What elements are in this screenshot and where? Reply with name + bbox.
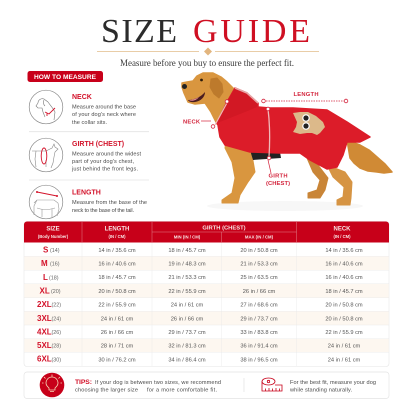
length heading: LENGTH bbox=[72, 190, 101, 197]
fit advice text: For the best fit, measure your dog bbox=[290, 380, 376, 386]
dog tail bbox=[347, 140, 392, 173]
row S: 18 in / 45.7 cm bbox=[168, 248, 206, 254]
row 5XL: (28) bbox=[52, 344, 61, 350]
girth heading: GIRTH (CHEST) bbox=[72, 141, 124, 148]
row 3XL: 3XL bbox=[37, 314, 52, 323]
row S: S bbox=[43, 246, 49, 254]
row L: (18) bbox=[49, 275, 59, 281]
table header: NECK bbox=[333, 226, 351, 232]
how to measure badge: HOW TO MEASURE bbox=[34, 74, 97, 81]
table header: (Body Number) bbox=[38, 234, 69, 239]
neck description bbox=[72, 105, 136, 126]
row 6XL: 6XL bbox=[37, 355, 52, 364]
neck description: the collar sits. bbox=[72, 120, 107, 126]
black chest strap bbox=[250, 150, 281, 160]
row M: (16) bbox=[50, 262, 60, 268]
row M: 19 in / 48.3 cm bbox=[168, 262, 206, 268]
length description: Measure from the base of the bbox=[72, 200, 147, 206]
row S bbox=[43, 246, 363, 254]
row 2XL: 2XL bbox=[37, 300, 52, 309]
row M: 21 in / 53.3 cm bbox=[240, 262, 278, 268]
row L: 21 in / 53.3 cm bbox=[168, 275, 206, 281]
icon: light bulb bbox=[40, 373, 64, 397]
row 3XL: (24) bbox=[52, 316, 61, 322]
row XL: XL bbox=[40, 286, 50, 296]
row XL bbox=[40, 286, 363, 296]
row L: 16 in / 40.6 cm bbox=[325, 275, 363, 281]
row 6XL: (30) bbox=[52, 357, 61, 363]
row 6XL: 38 in / 96.5 cm bbox=[240, 357, 278, 363]
girth measure line bbox=[266, 107, 290, 187]
table header: MAX (IN / CM) bbox=[245, 234, 274, 240]
row 2XL: 24 in / 61 cm bbox=[171, 303, 204, 309]
row 4XL: (26) bbox=[52, 330, 61, 336]
icon: measuring tape bbox=[262, 378, 282, 391]
coat owl patch bbox=[293, 112, 325, 135]
dog head and neck bbox=[182, 73, 235, 124]
fit advice text: while standing naturally. bbox=[289, 388, 352, 394]
row 2XL: 27 in / 68.6 cm bbox=[240, 303, 278, 309]
row 2XL: 20 in / 50.8 cm bbox=[325, 303, 363, 309]
row 3XL: 20 in / 50.8 cm bbox=[325, 316, 363, 322]
row S: 14 in / 35.6 cm bbox=[98, 248, 136, 254]
fit advice text bbox=[289, 380, 376, 394]
row M: M bbox=[41, 259, 48, 268]
neck heading: NECK bbox=[72, 94, 92, 101]
table header: (IN / CM) bbox=[109, 234, 126, 239]
size table bbox=[24, 222, 389, 366]
title: GUIDE bbox=[193, 13, 310, 50]
title: SIZE bbox=[101, 13, 177, 50]
row 5XL bbox=[37, 341, 361, 350]
row S: 20 in / 50.8 cm bbox=[240, 248, 278, 254]
table header: GIRTH (CHEST) bbox=[202, 226, 246, 232]
row 4XL: 29 in / 73.7 cm bbox=[168, 330, 206, 336]
girth description: part of your dog's chest, bbox=[72, 159, 134, 165]
table row stripes bbox=[24, 256, 389, 352]
row 6XL: 30 in / 76.2 cm bbox=[98, 357, 136, 363]
table header bbox=[24, 222, 389, 242]
girth measure line: GIRTH bbox=[268, 174, 288, 180]
dog illustration in red coat bbox=[182, 73, 392, 211]
row XL: 26 in / 66 cm bbox=[243, 289, 276, 295]
row XL: 20 in / 50.8 cm bbox=[98, 289, 136, 295]
girth description: just behind the front legs. bbox=[71, 167, 138, 173]
row S: (14) bbox=[50, 248, 60, 254]
how to measure badge bbox=[28, 71, 103, 82]
row 2XL: (22) bbox=[52, 303, 61, 309]
row 6XL: 24 in / 61 cm bbox=[328, 357, 361, 363]
neck description: Measure around the base bbox=[72, 105, 136, 111]
row 6XL: 34 in / 86.4 cm bbox=[168, 357, 206, 363]
row XL: (20) bbox=[51, 289, 61, 295]
coat hood bbox=[217, 88, 258, 123]
table header: (IN / CM) bbox=[334, 234, 351, 239]
girth description: Measure around the widest bbox=[72, 151, 141, 157]
panel: how to measure bbox=[28, 71, 149, 219]
length description: neck to the base of the tail. bbox=[72, 208, 134, 214]
table header: SIZE bbox=[46, 226, 60, 232]
row L: L bbox=[43, 273, 48, 282]
row XL: 22 in / 55.9 cm bbox=[168, 289, 206, 295]
dog front legs bbox=[222, 140, 255, 203]
row 5XL: 5XL bbox=[37, 341, 52, 350]
row 4XL: 4XL bbox=[37, 327, 52, 336]
tips text: If your dog is between two sizes, we recommend bbox=[95, 380, 221, 386]
row 3XL bbox=[37, 314, 363, 323]
row 3XL: 24 in / 61 cm bbox=[101, 316, 134, 322]
row M: 16 in / 40.6 cm bbox=[325, 262, 363, 268]
tips text: TIPS: bbox=[75, 379, 92, 386]
row 4XL: 26 in / 66 cm bbox=[101, 330, 134, 336]
dog back legs bbox=[307, 158, 352, 205]
tips panel bbox=[24, 372, 389, 398]
neck measure line bbox=[183, 100, 229, 128]
row L: 18 in / 45.7 cm bbox=[98, 275, 136, 281]
neck measure line: NECK bbox=[183, 120, 201, 126]
length measure line: LENGTH bbox=[294, 92, 318, 98]
table header: MIN (IN / CM) bbox=[174, 234, 201, 240]
row 2XL: 22 in / 55.9 cm bbox=[98, 303, 136, 309]
title bbox=[101, 13, 310, 50]
row 2XL bbox=[37, 300, 363, 309]
length description bbox=[72, 200, 147, 214]
row 4XL: 22 in / 55.9 cm bbox=[325, 330, 363, 336]
tips text: choosing the larger size bbox=[75, 388, 138, 394]
girth measure line: (CHEST) bbox=[266, 181, 290, 187]
row 5XL: 24 in / 61 cm bbox=[328, 344, 361, 350]
table header: LENGTH bbox=[105, 226, 129, 232]
row S: 14 in / 35.6 cm bbox=[325, 248, 363, 254]
icon: neck measurement bbox=[29, 90, 63, 124]
tips text bbox=[75, 379, 221, 394]
row 3XL: 26 in / 66 cm bbox=[171, 316, 204, 322]
row 4XL bbox=[37, 327, 363, 336]
row L bbox=[43, 273, 363, 282]
row 3XL: 29 in / 73.7 cm bbox=[240, 316, 278, 322]
row 6XL bbox=[37, 355, 361, 364]
row XL: 18 in / 45.7 cm bbox=[325, 289, 363, 295]
icon: length measurement bbox=[29, 185, 63, 219]
row 5XL: 36 in / 91.4 cm bbox=[240, 344, 278, 350]
dog ear bbox=[210, 78, 223, 98]
row M: 16 in / 40.6 cm bbox=[98, 262, 136, 268]
length measure line bbox=[262, 92, 348, 103]
row 4XL: 33 in / 83.8 cm bbox=[240, 330, 278, 336]
row M bbox=[41, 259, 363, 268]
subtitle: Measure before you buy to ensure the perfect fit. bbox=[120, 58, 294, 68]
red coat bbox=[217, 88, 370, 169]
dog muzzle and mouth bbox=[182, 79, 205, 102]
row 5XL: 32 in / 81.3 cm bbox=[168, 344, 206, 350]
neck description: of your dog's neck where bbox=[72, 112, 136, 118]
row L: 25 in / 63.5 cm bbox=[240, 275, 278, 281]
row 5XL: 28 in / 71 cm bbox=[101, 344, 134, 350]
girth description bbox=[71, 151, 141, 173]
icon: girth measurement bbox=[29, 138, 63, 172]
tips text: for a more comfortable fit. bbox=[147, 388, 217, 394]
ornament divider bbox=[97, 48, 319, 56]
